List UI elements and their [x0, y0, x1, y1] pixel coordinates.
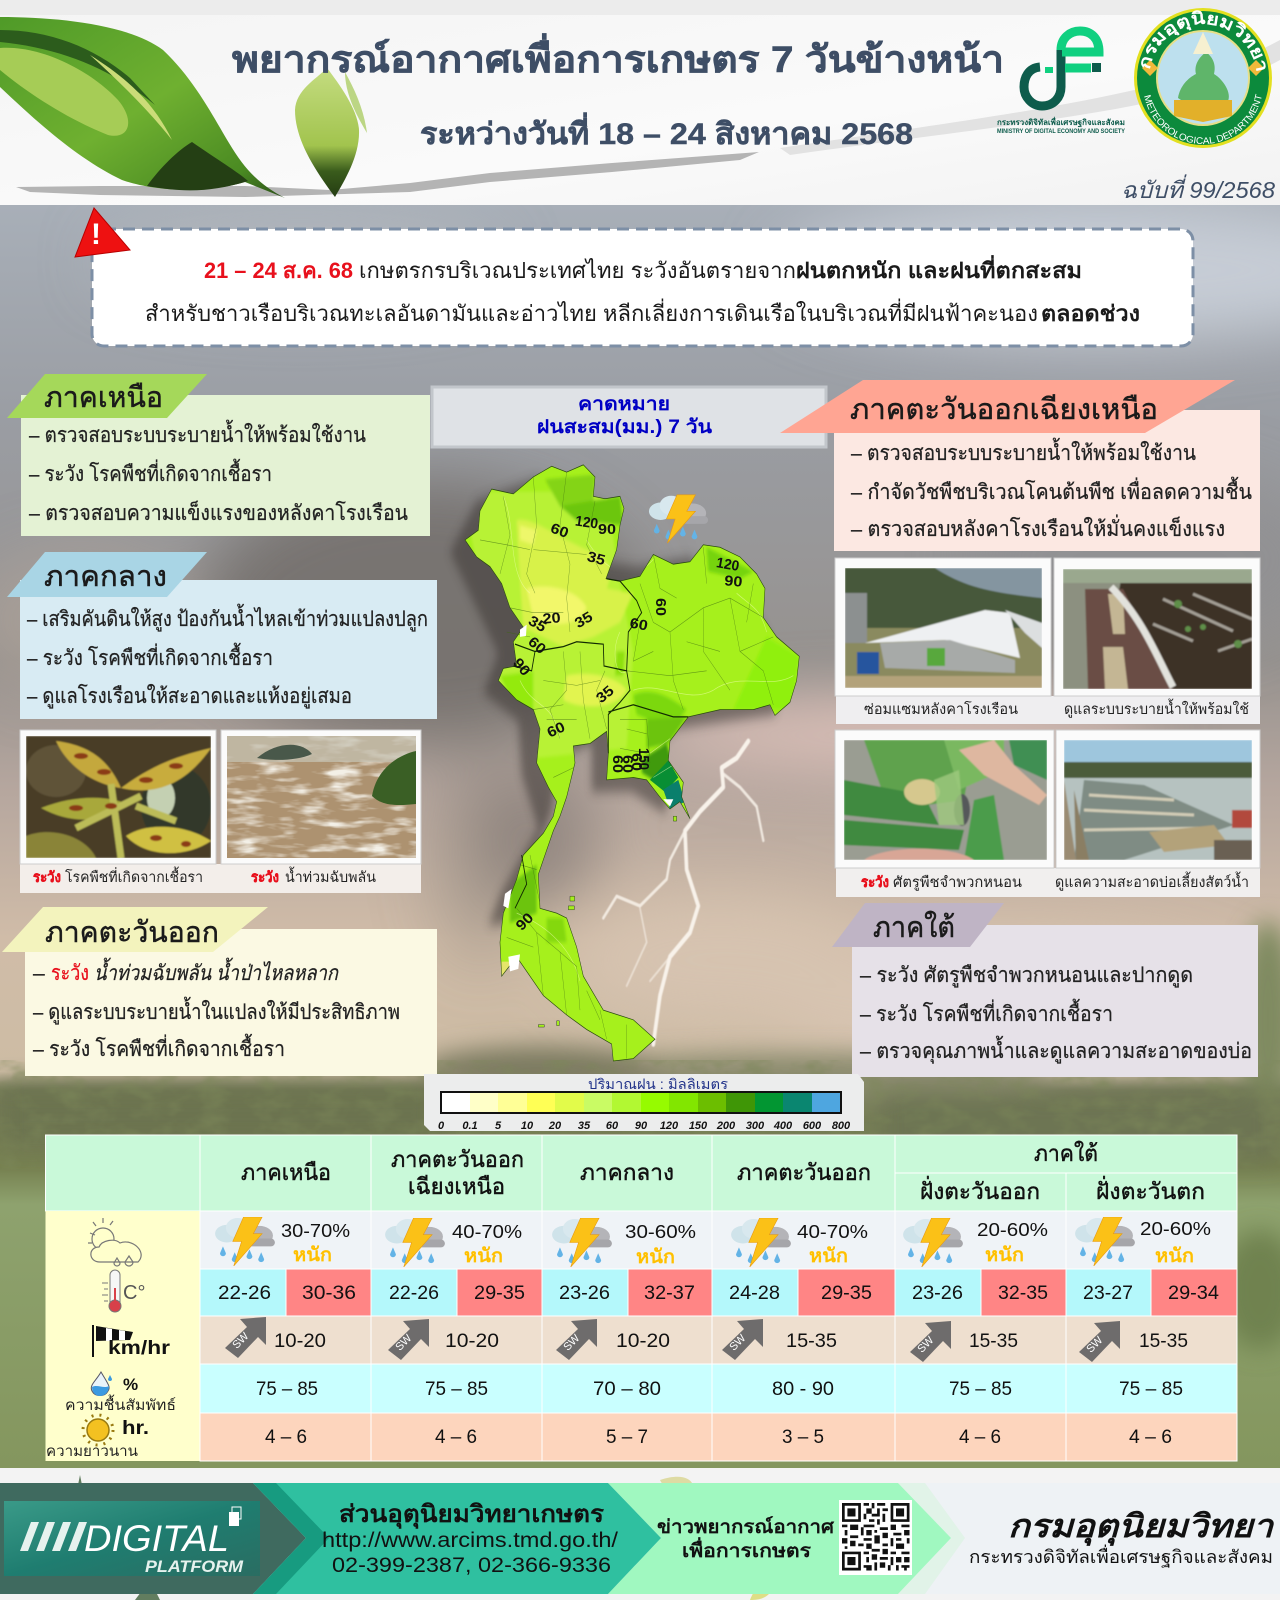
- icon: storm over map: [649, 495, 708, 543]
- contour labels: 60: [548, 521, 571, 542]
- row: wind: SW: [393, 1332, 415, 1353]
- row: wind: [93, 1317, 1188, 1362]
- column headings: เฉียงเหนือ: [408, 1174, 505, 1199]
- contour labels: [509, 514, 743, 934]
- captions: [861, 698, 1249, 891]
- panel: east: [2, 907, 437, 1076]
- bullet list: north: [29, 420, 408, 525]
- map title plate: ฝนสะสม(มม.) 7 วัน: [537, 417, 712, 438]
- column headings: ภาคตะวันออก: [737, 1160, 871, 1185]
- row: sunshine duration: 4 – 6: [959, 1427, 1001, 1448]
- row: wind: 10-20: [445, 1331, 499, 1352]
- row: wind: SW: [561, 1332, 583, 1353]
- contour labels: 90: [724, 573, 743, 591]
- agri-weather news label: ข่าวพยากรณ์อากาศ: [657, 1516, 835, 1538]
- photo: farm building roof: [835, 558, 1051, 696]
- header band: [0, 0, 1280, 205]
- legend scale labels: 60: [606, 1120, 619, 1132]
- photo: worm on corn: [835, 730, 1054, 868]
- digital platform badge: DIGITAL: [84, 1518, 229, 1559]
- contour labels: 35: [525, 613, 549, 636]
- row: weather condition: [88, 1217, 1211, 1268]
- legend scale labels: 200: [716, 1120, 736, 1132]
- bullet list: east: [33, 957, 400, 1061]
- department name: กระทรวงดิจิทัลเพื่อเศรษฐกิจและสังคม: [969, 1544, 1273, 1568]
- captions: ระวัง: [251, 870, 279, 886]
- column headings: ภาคเหนือ: [241, 1160, 331, 1185]
- icon: large leaf: [0, 17, 285, 198]
- column headings: ภาคกลาง: [580, 1160, 674, 1185]
- icon: water drop and percent: ความชื้นสัมพัทธ์: [65, 1394, 176, 1414]
- contact block: ส่วนอุตุนิยมวิทยาเกษตร: [339, 1501, 604, 1530]
- bullet list: north: – ตรวจสอบระบบระบายน้ำให้พร้อมใช้งาน: [29, 420, 366, 447]
- icon: water drop and percent: [65, 1372, 176, 1414]
- alert panel: [92, 229, 1193, 346]
- captions: โรคพืชที่เกิดจากเชื้อรา: [65, 866, 203, 886]
- row: weather condition: หนัก: [293, 1245, 332, 1266]
- bullet list: east: ระวัง: [51, 962, 89, 985]
- forecast table: [46, 1135, 1237, 1461]
- icon: wind sock and unit: [93, 1325, 171, 1359]
- heading: east: ภาคตะวันออก: [45, 917, 219, 949]
- bullet list: east: – ระวัง โรคพืชที่เกิดจากเชื้อรา: [33, 1034, 285, 1061]
- row: temperature: 32-37: [644, 1283, 695, 1304]
- icon: wind sock and unit: km/hr: [108, 1338, 171, 1359]
- contour labels: 60: [652, 598, 668, 616]
- bullet list: south: – ตรวจคุณภาพน้ำและดูแลความสะอาดของบ่อ: [860, 1036, 1252, 1064]
- row: temperature: 23-26: [912, 1283, 963, 1304]
- captions: น้ำท่วมฉับพลัน: [285, 866, 376, 886]
- bullet list: central: [27, 604, 428, 709]
- map title plate: [432, 387, 826, 447]
- row: weather condition: หนัก: [636, 1247, 675, 1268]
- icon: water drop and percent: %: [123, 1375, 138, 1394]
- contact block: http://www.arcims.tmd.go.th/: [322, 1529, 618, 1552]
- captions: [33, 866, 376, 886]
- row: temperature: 29-34: [1168, 1283, 1219, 1304]
- legend colour bar: [441, 1092, 841, 1113]
- swoosh curve: [780, 40, 1280, 155]
- bullet list: central: – ระวัง โรคพืชที่เกิดจากเชื้อรา: [27, 643, 273, 670]
- legend scale labels: 600: [803, 1120, 822, 1132]
- bullet list: central: – ดูแลโรงเรือนให้สะอาดและแห้งอยู่เสมอ: [27, 684, 352, 709]
- subtitle: date range: ระหว่างวันที่ 18 – 24 สิงหาคม 2568: [420, 112, 913, 151]
- legend scale labels: 400: [773, 1120, 793, 1132]
- row: weather condition: หนัก: [985, 1245, 1024, 1266]
- row: wind: SW: [230, 1330, 252, 1351]
- bullet list: east: น้ำท่วมฉับพลัน น้ำป่าไหลหลาก: [94, 957, 339, 985]
- legend scale labels: 300: [746, 1120, 765, 1132]
- row: sunshine duration: 4 – 6: [1129, 1427, 1172, 1448]
- row: sunshine duration: 3 – 5: [782, 1427, 824, 1448]
- icon: ministry logo: [997, 31, 1125, 135]
- panel: south: [832, 903, 1258, 1077]
- icon: meteorological department seal: [1134, 8, 1272, 148]
- row: temperature: 22-26: [218, 1283, 271, 1304]
- heading tag: northeast: [780, 380, 1235, 433]
- row: relative humidity: 80 - 90: [772, 1379, 834, 1400]
- bullet list: south: [860, 964, 1252, 1064]
- band: pale translucent section: [898, 1483, 965, 1594]
- photo: drainage ditch: [1054, 558, 1260, 696]
- panel: north: [7, 374, 430, 536]
- legend scale labels: 90: [635, 1120, 648, 1132]
- bullet list: north: – ตรวจสอบความแข็งแรงของหลังคาโรงเรือน: [29, 499, 408, 525]
- legend scale labels: 0.1: [462, 1120, 478, 1132]
- row: temperature: 29-35: [474, 1283, 525, 1304]
- table cell fills: [46, 1135, 1237, 1461]
- contour labels: 90: [598, 522, 616, 538]
- department name: กรมอุตุนิยมวิทยา: [1008, 1508, 1275, 1546]
- digital platform badge: [4, 1501, 260, 1576]
- panel: northeast: [780, 380, 1260, 551]
- map title plate: คาดหมาย: [578, 394, 670, 415]
- icon: warning triangle: !: [91, 218, 101, 251]
- photo: aquaculture pond: [1056, 730, 1260, 868]
- icon: sun and hours: hr.: [122, 1418, 149, 1439]
- row: wind: SW: [1084, 1334, 1106, 1355]
- bullet list: south: – ระวัง ศัตรูพืชจำพวกหนอนและปากดูด: [860, 964, 1193, 988]
- row: wind: 10-20: [274, 1331, 326, 1352]
- title: พยากรณ์อากาศเพื่อการเกษตร 7 วันข้างหน้า: [232, 33, 1004, 80]
- agri-weather news label: เพื่อการเกษตร: [682, 1537, 812, 1562]
- row: relative humidity: 75 – 85: [949, 1379, 1012, 1400]
- row: weather condition: 20-60%: [1140, 1219, 1211, 1239]
- row: temperature: 30-36: [302, 1283, 356, 1304]
- digital platform badge: PLATFORM: [145, 1557, 244, 1576]
- photo: flash flood: [221, 730, 421, 864]
- row: weather condition: 40-70%: [452, 1222, 522, 1242]
- contour labels: 90: [509, 655, 533, 679]
- row: sunshine duration: 4 – 6: [435, 1427, 477, 1448]
- heading tag: central: [7, 552, 207, 597]
- contact block: 02-399-2387, 02-366-9336: [332, 1554, 611, 1577]
- map shadow: [450, 478, 783, 925]
- legend scale labels: 5: [495, 1120, 502, 1132]
- alert line 2: สำหรับชาวเรือบริเวณทะเลอันดามันและอ่าวไทย หลีกเลี่ยงการเดินเรือในบริเวณที่มีฝนฟ้าคะนอง: [145, 298, 1038, 326]
- issue number: ฉบับที่ 99/2568: [1121, 174, 1275, 203]
- photo: leaf disease: [20, 730, 216, 864]
- band: mint section: [608, 1483, 951, 1594]
- icon: meteorological department seal: กรมอุตุนิยมวิทยา: [1141, 10, 1266, 71]
- heading tag: south: [832, 903, 1004, 947]
- captions: ดูแลระบบระบายน้ำให้พร้อมใช้: [1064, 698, 1249, 718]
- bullet list: northeast: – ตรวจสอบระบบระบายน้ำให้พร้อมใช้งาน: [851, 438, 1196, 465]
- contour labels: 150: [635, 748, 651, 770]
- rainfall map of Thailand: [450, 453, 807, 1073]
- heading: central: ภาคกลาง: [44, 561, 167, 593]
- captions: ระวัง: [861, 875, 889, 891]
- row: wind: SW: [915, 1334, 937, 1355]
- icon: sun and hours: ความยาวนาน: [46, 1444, 138, 1460]
- contour labels: 60: [525, 634, 549, 658]
- legend scale labels: 0: [438, 1120, 445, 1132]
- bullet list: south: – ระวัง โรคพืชที่เกิดจากเชื้อรา: [860, 999, 1113, 1026]
- row: sunshine duration: 5 – 7: [606, 1427, 648, 1448]
- contour labels: 35: [593, 683, 617, 707]
- row: wind: SW: [727, 1332, 749, 1353]
- contour labels: 60: [609, 755, 625, 773]
- rainfall legend: [424, 1074, 864, 1132]
- row: temperature: 32-35: [998, 1283, 1048, 1304]
- contour labels: 35: [572, 609, 596, 632]
- row: wind: 15-35: [1139, 1331, 1188, 1352]
- row: weather condition: 30-70%: [281, 1221, 350, 1241]
- alert line 1: ฝนตกหนัก และฝนที่ตกสะสม: [796, 254, 1082, 283]
- row: relative humidity: 75 – 85: [256, 1379, 318, 1400]
- ground shadow under leaves: [16, 152, 759, 197]
- row: weather condition: 30-60%: [625, 1222, 696, 1242]
- icon: thermometer: [102, 1270, 145, 1312]
- legend scale labels: 150: [689, 1120, 708, 1132]
- contour labels: 90: [513, 910, 537, 934]
- captions: ระวัง: [33, 870, 61, 886]
- row: temperature: 23-26: [559, 1283, 610, 1304]
- band: dark teal section: [0, 1483, 306, 1594]
- heading: northeast: ภาคตะวันออกเฉียงเหนือ: [850, 394, 1158, 426]
- bullet list: east: – ดูแลระบบระบายน้ำในแปลงให้มีประสิทธิภาพ: [33, 997, 400, 1025]
- background: storm sky and field photo: [0, 200, 1280, 1470]
- photo panel: left hazards: [20, 730, 421, 893]
- row: temperature: [102, 1270, 1219, 1312]
- contour labels: 20: [542, 610, 561, 628]
- row: sunshine duration: 4 – 6: [265, 1427, 307, 1448]
- QR code: [839, 1500, 912, 1575]
- bullet list: east: –: [33, 962, 45, 985]
- row: temperature: 22-26: [389, 1283, 439, 1304]
- alert line 1: เกษตรกรบริเวณประเทศไทย ระวังอันตรายจาก: [359, 258, 796, 283]
- row: sunshine duration: [46, 1415, 1172, 1460]
- department name: [969, 1508, 1275, 1568]
- bullet list: northeast: [851, 438, 1252, 541]
- row: weather condition: 20-60%: [977, 1220, 1048, 1240]
- row: weather condition: หนัก: [809, 1246, 848, 1267]
- legend scale labels: 20: [548, 1120, 562, 1132]
- row: relative humidity: [65, 1372, 1183, 1414]
- icon: warning triangle: [75, 208, 130, 257]
- contour labels: 60: [619, 755, 635, 773]
- band: teal section: [253, 1483, 661, 1594]
- footer decorative leaves: [75, 1475, 775, 1600]
- contour labels: 60: [545, 719, 568, 741]
- row: temperature: 29-35: [821, 1283, 872, 1304]
- contour labels: 60: [628, 616, 649, 635]
- row: relative humidity: 75 – 85: [1119, 1379, 1183, 1400]
- row: wind: 15-35: [969, 1331, 1018, 1352]
- heading: north: ภาคเหนือ: [44, 382, 163, 414]
- contour labels: 120: [715, 555, 740, 575]
- footer: [0, 1468, 1280, 1600]
- column headings: ภาคตะวันออก: [391, 1147, 524, 1172]
- captions: ดูแลความสะอาดบ่อเลี้ยงสัตว์น้ำ: [1055, 871, 1249, 891]
- icon: sun and hours: [46, 1415, 149, 1460]
- icon: ministry logo: กระทรวงดิจิทัลเพื่อเศรษฐกิจและสังคม: [997, 116, 1125, 128]
- heading: south: ภาคใต้: [873, 910, 955, 944]
- row: weather condition: 40-70%: [797, 1222, 868, 1242]
- legend scale labels: [438, 1120, 851, 1132]
- row: relative humidity: 75 – 85: [425, 1379, 488, 1400]
- row: temperature: 24-28: [729, 1283, 780, 1304]
- contour labels: 35: [585, 549, 607, 569]
- alert line 1: 21 – 24 ส.ค. 68: [204, 258, 353, 283]
- row: temperature: 23-27: [1083, 1283, 1133, 1304]
- bullet list: northeast: – กำจัดวัชพืชบริเวณโคนต้นพืช เพื่อลดความชื้น: [851, 477, 1252, 504]
- row: weather condition: หนัก: [464, 1246, 503, 1267]
- column headings: ฝั่งตะวันออก: [920, 1175, 1040, 1204]
- panel: central: [7, 552, 437, 719]
- column headings: [241, 1141, 1205, 1204]
- legend title: ปริมาณฝน : มิลลิเมตร: [588, 1076, 728, 1092]
- alert line 2: ตลอดช่วง: [1041, 301, 1140, 326]
- icon: thermometer: C°: [123, 1282, 145, 1304]
- legend scale labels: 120: [660, 1120, 679, 1132]
- heading tag: north: [7, 374, 207, 418]
- contact block: [322, 1501, 618, 1577]
- row: weather condition: หนัก: [1155, 1246, 1194, 1267]
- heading tag: east: [2, 907, 268, 952]
- captions: ซ่อมแซมหลังคาโรงเรือน: [864, 700, 1018, 718]
- contour labels: 120: [574, 514, 599, 533]
- contour labels: 60: [628, 753, 644, 771]
- icon: ministry logo: MINISTRY OF DIGITAL ECONOMY AND SOCIETY: [997, 129, 1125, 135]
- bullet list: north: – ระวัง โรคพืชที่เกิดจากเชื้อรา: [29, 459, 272, 486]
- legend scale labels: 800: [832, 1120, 851, 1132]
- row: wind: 10-20: [616, 1331, 670, 1352]
- icon: meteorological department seal: METEOROLOGICAL DEPARTMENT: [1144, 94, 1262, 144]
- column headings: ภาคใต้: [1034, 1141, 1098, 1166]
- captions: ศัตรูพืชจำพวกหนอน: [893, 874, 1022, 891]
- column headings: ฝั่งตะวันตก: [1096, 1175, 1205, 1204]
- icon: sun cloud rain outline: [88, 1218, 141, 1266]
- bullet list: northeast: – ตรวจสอบหลังคาโรงเรือนให้มั่นคงแข็งแรง: [851, 514, 1225, 541]
- row: wind: 15-35: [786, 1331, 837, 1352]
- legend scale labels: 35: [578, 1120, 591, 1132]
- icon: small leaf: [295, 68, 367, 197]
- photo panel: right practices: [835, 558, 1260, 897]
- bullet list: central: – เสริมคันดินให้สูง ป้องกันน้ำไหลเข้าท่วมแปลงปลูก: [27, 604, 428, 632]
- agri-weather news label: [657, 1516, 835, 1562]
- row: relative humidity: 70 – 80: [593, 1379, 661, 1400]
- legend scale labels: 10: [521, 1120, 534, 1132]
- lightning bolts: [603, 741, 763, 1044]
